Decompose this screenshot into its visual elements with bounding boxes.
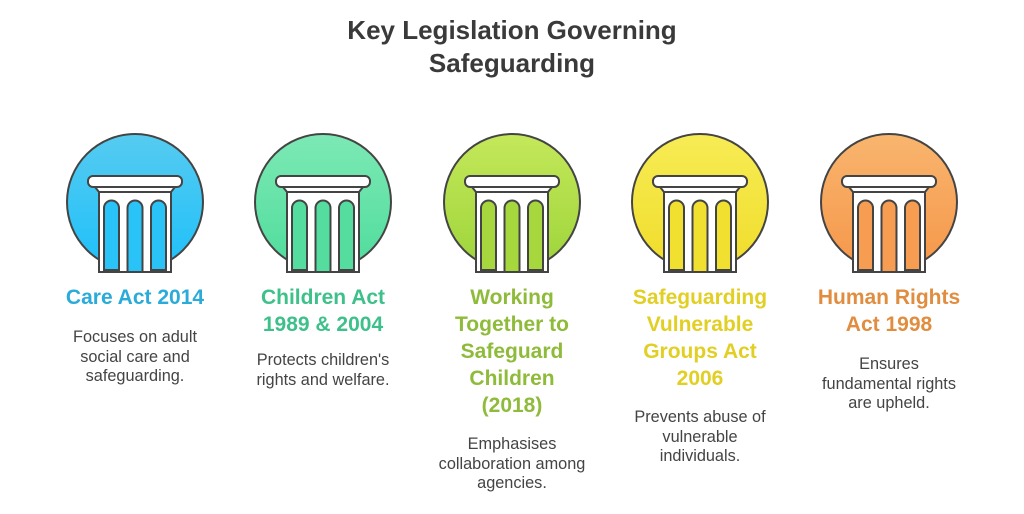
text: svga xyxy=(634,408,766,465)
icon: pillar yellow xyxy=(632,134,768,272)
text: working together xyxy=(439,435,585,492)
title: Safeguarding xyxy=(429,48,595,78)
heading: human rights xyxy=(818,286,960,336)
heading: children act: 1989 & 2004 xyxy=(263,313,383,336)
icon: pillar lime xyxy=(444,134,580,272)
icons xyxy=(66,133,958,273)
text: children act xyxy=(256,351,390,388)
heading: svga xyxy=(633,286,767,390)
text: human rights: are upheld. xyxy=(848,394,930,412)
heading: human rights: Act 1998 xyxy=(846,313,932,336)
text: working together: agencies. xyxy=(477,474,547,492)
text: human rights: Ensures xyxy=(859,355,919,373)
icon: pillar green xyxy=(255,134,391,272)
text: human rights xyxy=(822,355,956,412)
heading: working together: Together to xyxy=(455,313,569,336)
text: care act: safeguarding. xyxy=(86,367,184,385)
text: working together: Emphasises xyxy=(468,435,556,453)
heading: working together: (2018) xyxy=(482,394,542,417)
heading: working together: Children xyxy=(469,367,555,390)
heading: children act xyxy=(261,286,385,336)
text: working together: collaboration among xyxy=(439,454,585,472)
heading: svga: Safeguarding xyxy=(633,286,767,309)
text: care act: Focuses on adult xyxy=(73,328,197,346)
heading: human rights: Human Rights xyxy=(818,286,960,309)
heading: svga: Vulnerable xyxy=(647,313,753,336)
heading: working together: Safeguard xyxy=(461,340,563,363)
heading: working together xyxy=(455,286,569,417)
text: svga: Prevents abuse of xyxy=(634,408,766,426)
icon: pillar orange xyxy=(821,134,957,272)
title xyxy=(347,15,677,78)
heading: svga: Groups Act xyxy=(643,340,757,363)
icon: pillar blue xyxy=(67,134,203,272)
text: children act: rights and welfare. xyxy=(256,370,390,388)
heading: svga: 2006 xyxy=(677,367,723,390)
text: care act xyxy=(73,328,197,385)
text: svga: vulnerable xyxy=(662,428,738,446)
heading: children act: Children Act xyxy=(261,286,385,309)
heading: care act: Care Act 2014 xyxy=(66,286,204,309)
text: care act: social care and xyxy=(80,348,190,366)
text: human rights: fundamental rights xyxy=(822,374,956,392)
text: svga: individuals. xyxy=(660,447,740,465)
heading: working together: Working xyxy=(470,286,554,309)
text: children act: Protects children's xyxy=(257,351,389,369)
title: Key Legislation Governing xyxy=(347,15,677,45)
